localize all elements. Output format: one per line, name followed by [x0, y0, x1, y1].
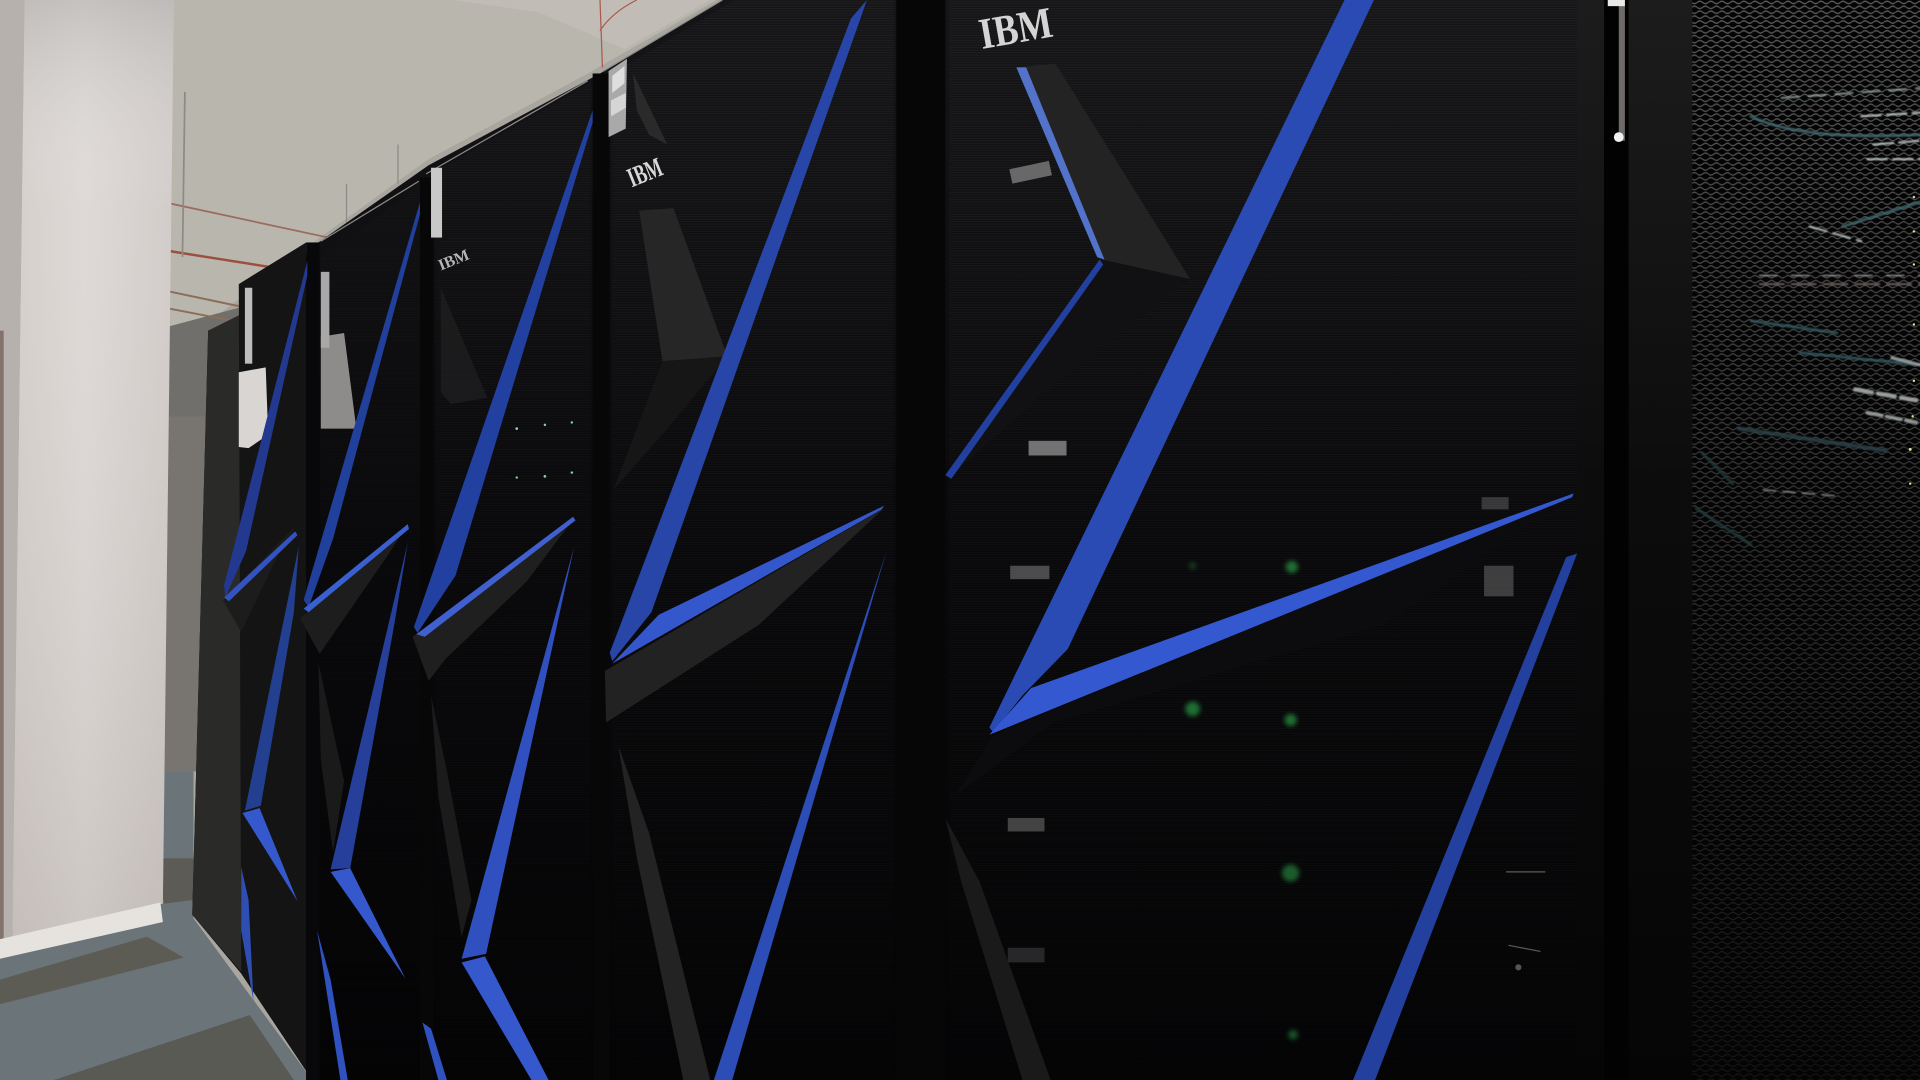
blue edge: [612, 506, 884, 664]
perforated mesh panels: [436, 1, 1577, 602]
cabinet 2: [300, 202, 420, 1080]
black fold: [223, 524, 298, 632]
floor: [0, 771, 312, 1080]
green status lights: [1185, 561, 1299, 1040]
card slot: [1506, 872, 1545, 951]
black fold: [605, 508, 884, 722]
blue strip upper: [224, 261, 307, 598]
top label: [245, 288, 252, 364]
blue strip upper: [989, 0, 1374, 732]
adjacent rack mesh with cables: [1692, 0, 1920, 1080]
right frame and door edge: [1577, 0, 1695, 1080]
status lights: [1909, 196, 1915, 485]
black sliver: [618, 746, 710, 1080]
white reflection: [321, 333, 356, 429]
pillar skirting: [0, 902, 163, 959]
blue strip lower: [245, 546, 299, 811]
vent badges: [1008, 161, 1513, 962]
logo: IBM: [436, 247, 472, 274]
black handle: [1016, 64, 1190, 279]
pillar: [0, 0, 174, 959]
light glint: [1614, 132, 1624, 142]
cabinet 5 (nearest): [945, 0, 1577, 1080]
cabinet frames: [306, 0, 945, 1080]
blue sliver: [241, 867, 253, 1002]
blue strip lower: [1353, 553, 1577, 1080]
cabinet 1 (far left): [223, 261, 307, 1002]
background: ceiling and back wall: [0, 0, 759, 1080]
cabinet 3: [413, 110, 593, 1080]
blue strip upper: [610, 0, 867, 661]
blue edge: [989, 493, 1573, 735]
logo: IBM: [623, 152, 667, 194]
cabinet top trim: [321, 0, 722, 241]
black fold: [955, 496, 1573, 796]
ceiling pipes and hangers: [169, 0, 637, 321]
blue edge: [224, 531, 298, 601]
blue strip lower: [714, 551, 887, 1080]
server lights: [515, 421, 573, 479]
blue strip bottom: [242, 808, 298, 901]
top labels: [609, 59, 627, 137]
cabinet 4: [605, 0, 887, 1080]
black sliver: [945, 818, 1051, 1080]
cables: [1696, 88, 1920, 545]
white reflection: [239, 367, 268, 448]
black handle: [639, 208, 727, 361]
